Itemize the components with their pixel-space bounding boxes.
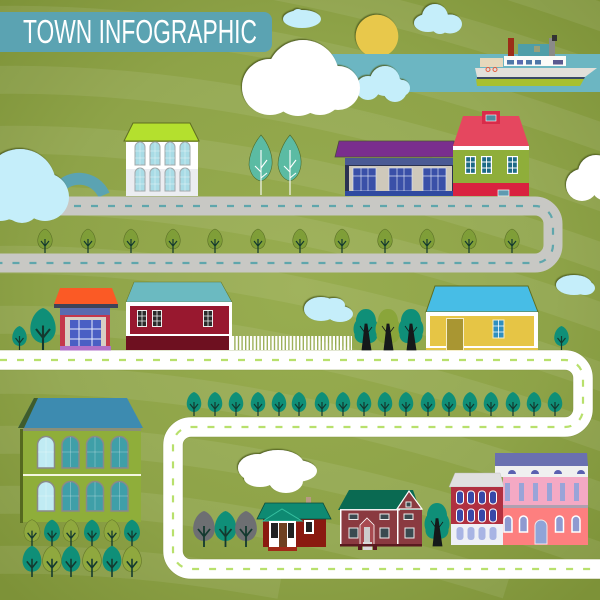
pink roof house: [453, 111, 529, 196]
cloud: small blue top: [283, 9, 321, 28]
cloud: blue small right: [556, 275, 595, 295]
arc rainbow: [56, 179, 104, 195]
pink hall: [495, 453, 588, 545]
hull: [475, 68, 597, 77]
cloud: white right: [566, 155, 600, 201]
ship: [475, 35, 597, 86]
bottom left trees: [193, 511, 257, 547]
cloud: blue left: [0, 149, 69, 223]
cloud: large white: [242, 40, 360, 116]
three bushy trees: [354, 309, 423, 350]
brown gabled house: [338, 490, 422, 550]
rear cabin: [480, 58, 503, 67]
teal tree row: [187, 392, 562, 416]
sun: [356, 15, 398, 54]
river: [330, 54, 600, 92]
white building lime roof: [124, 123, 199, 196]
picket fence: [232, 336, 352, 350]
red barn: [126, 282, 232, 350]
orange roof garage: [54, 288, 118, 350]
title banner: [0, 12, 272, 52]
cloud: blue top right: [414, 4, 462, 34]
tree row along grey road: [38, 229, 519, 253]
cloud: white bottom: [238, 450, 317, 493]
small right tree: [554, 326, 569, 350]
title text: TOWN INFOGRAPHIC: [23, 13, 257, 50]
cloud: blue on river: [356, 66, 410, 102]
red cottage: [257, 497, 331, 551]
white main road: [0, 360, 600, 569]
life rings: [486, 68, 490, 72]
teal bushy tree: [425, 503, 449, 546]
small left trees: [12, 308, 56, 350]
upper cabin: [518, 44, 549, 56]
large green building: [18, 398, 143, 523]
deck cabin: [504, 56, 566, 66]
red and white townhouse: [449, 473, 504, 545]
funnels: [508, 38, 514, 60]
trees below green building: [23, 520, 141, 577]
purple roof house: [335, 141, 454, 196]
yellow house: [426, 286, 538, 350]
cloud: blue mid: [304, 297, 353, 322]
grey upper road: [0, 206, 553, 263]
teal trees with white trunks: [249, 135, 301, 195]
